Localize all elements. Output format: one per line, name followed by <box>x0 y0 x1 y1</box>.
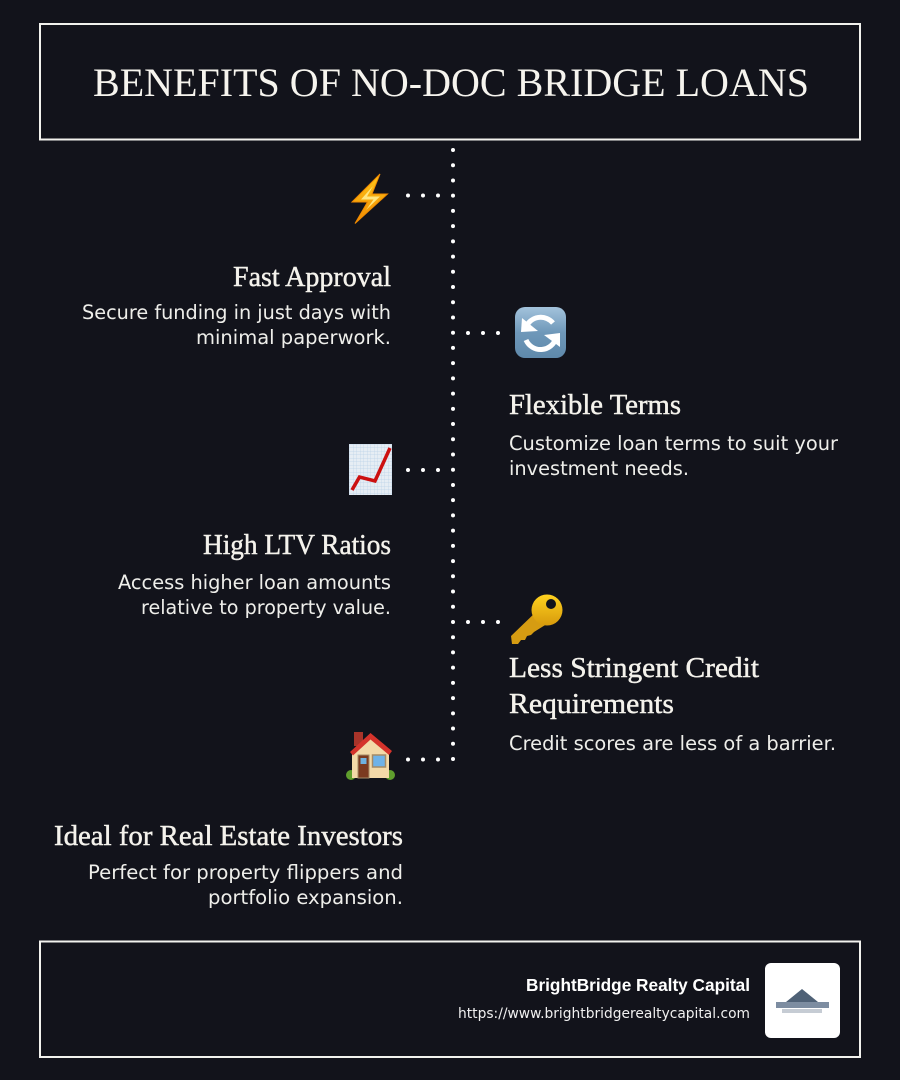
description: Perfect for property flippers and <box>88 861 403 884</box>
connector <box>408 758 453 762</box>
description: Access higher loan amounts <box>118 571 391 594</box>
connector <box>408 468 453 472</box>
description: relative to property value. <box>141 596 391 619</box>
title: BENEFITS OF NO-DOC BRIDGE LOANS <box>93 60 809 105</box>
description: Customize loan terms to suit your <box>509 432 839 455</box>
heading: High LTV Ratios <box>203 530 391 561</box>
header panel <box>40 24 860 140</box>
benefit: high LTV ratios <box>118 444 453 619</box>
heading: Flexible Terms <box>509 390 681 421</box>
icon: key <box>511 594 562 644</box>
company logo <box>765 963 840 1038</box>
footer panel <box>40 942 860 1057</box>
icon: rising chart <box>349 444 392 495</box>
icon: refresh arrows <box>515 307 566 358</box>
connector <box>408 194 453 198</box>
connector <box>468 331 505 335</box>
connector <box>468 620 505 624</box>
benefit: fast approval <box>82 174 453 349</box>
company name: BrightBridge Realty Capital <box>526 975 750 995</box>
heading: Less Stringent Credit <box>509 653 759 684</box>
description <box>118 571 391 619</box>
description: portfolio expansion. <box>208 886 403 909</box>
benefit: flexible terms <box>468 307 839 480</box>
description: minimal paperwork. <box>196 326 391 349</box>
heading: Ideal for Real Estate Investors <box>54 821 403 852</box>
website url: https://www.brightbridgerealtycapital.com <box>458 1006 750 1022</box>
description: Secure funding in just days with <box>82 301 391 324</box>
description <box>509 432 839 480</box>
icon: lightning bolt <box>352 174 388 224</box>
description <box>88 861 403 909</box>
timeline spine <box>451 150 455 760</box>
benefit: ideal for real estate investors <box>54 732 453 909</box>
heading: Fast Approval <box>233 262 391 293</box>
heading: Requirements <box>509 689 674 720</box>
benefit: less stringent credit requirements <box>468 594 836 755</box>
heading <box>509 653 759 720</box>
icon: house <box>346 732 395 780</box>
description: Credit scores are less of a barrier. <box>509 732 836 755</box>
description: investment needs. <box>509 457 689 480</box>
description <box>82 301 391 349</box>
